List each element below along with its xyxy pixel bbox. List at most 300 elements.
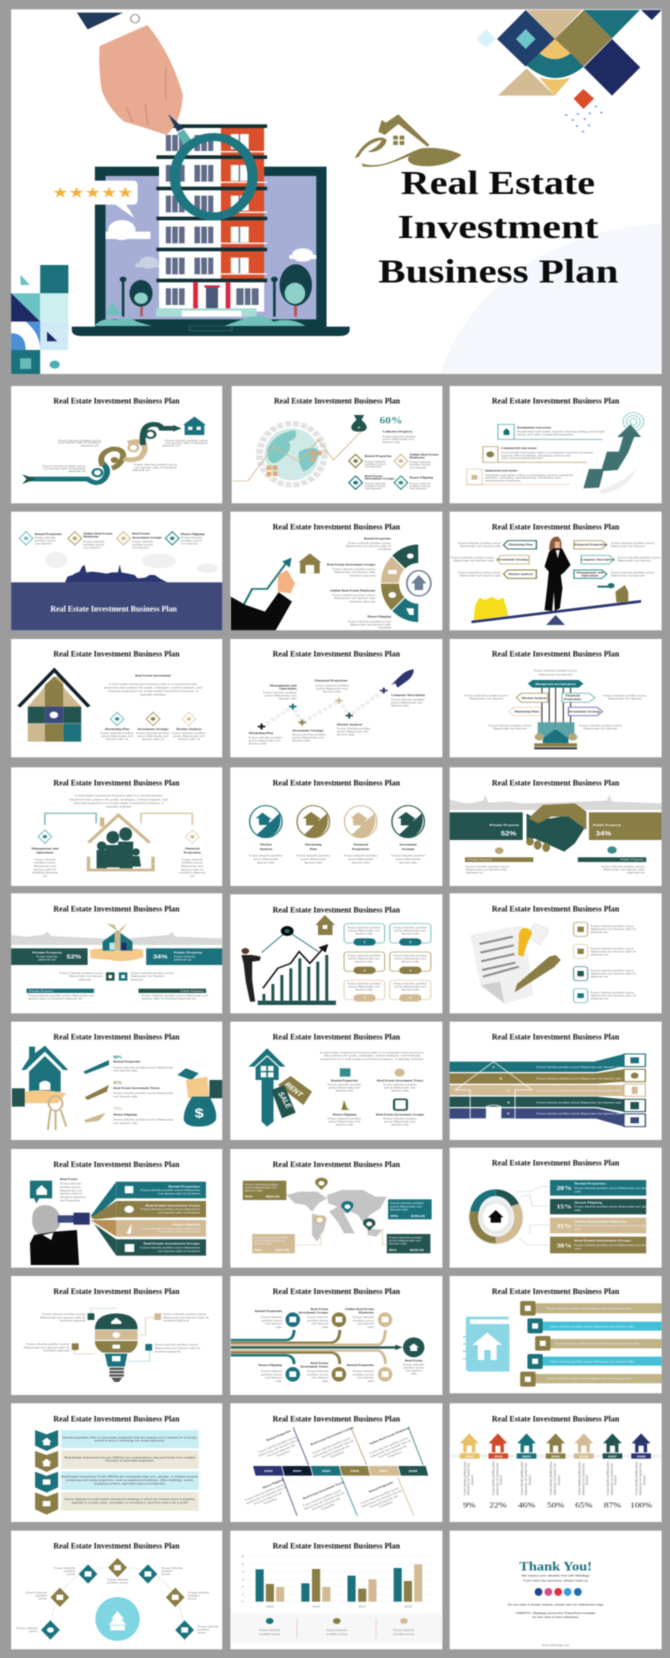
panel: family house: Maecenas non — [181, 864, 204, 868]
chart: bars: 0 — [242, 1600, 244, 1604]
panel: light bulb: Fusce lobortis porttitor purus — [42, 1312, 86, 1316]
panel: light bulb: Fusce lobortis porttitor purus — [26, 1342, 70, 1346]
panel: telescope man: House Flipping — [172, 1223, 200, 1226]
panel: growth chart: laoreet odio — [401, 960, 420, 964]
panel: key with tags: A real estate investment business plan is a comprehensive document — [320, 1051, 424, 1054]
panel: four ovals: Plan — [310, 847, 317, 851]
panel: donut — [450, 1148, 662, 1268]
panel: fishbone timeline: Maecenas non laoreet odio Ut — [303, 1491, 345, 1511]
panel: handshake: 52% — [501, 831, 516, 837]
panel: fishbone timeline: tincidunt placerat vel — [253, 1491, 283, 1505]
panel: globe: Fusce lobortis — [409, 460, 431, 464]
panel: fishbone timeline: Fusce lobortis porttitor purus — [244, 1483, 285, 1502]
panel: bar chart: porttitor purus — [259, 1632, 281, 1636]
panel: seven houses: 2024 — [522, 1455, 531, 1458]
panel: puzzle house: document that outlines the goals, strategies, market analysis, and — [104, 686, 203, 690]
panel: family house: porttitor purus — [34, 861, 56, 865]
panel: fishbone timeline: Maecenas non laoreet odio Ut — [245, 1485, 287, 1505]
panel: light bulb: Maecenas non laoreet odio Ut — [163, 1316, 209, 1319]
panel: donut: Online Real Estate Platforms — [574, 1220, 627, 1223]
icon: sale tag: SALE — [276, 1091, 294, 1109]
panel: seven houses: Maecenas non laoreet odio — [495, 1463, 499, 1495]
chart: bars: 6 — [242, 1555, 244, 1559]
panel: rocket timeline: ✚ — [380, 686, 388, 695]
panel: skyline banner: Fusce lobortis — [132, 540, 154, 543]
panel: bar chart: Fusce lobortis — [393, 1628, 415, 1632]
panel: donut: odio — [574, 1190, 581, 1193]
panel: hand and half wheel: tincidunt placerat — [350, 574, 375, 577]
panel: merging lines: Fusce lobortis — [353, 1315, 375, 1319]
panel: donut: 20% — [556, 1186, 572, 1192]
hero panel: cover slide — [11, 9, 662, 374]
panel: seven houses: Fusce lobortis porttitor purus — [606, 1461, 610, 1495]
panel: hand and half wheel: Maecenas non laoreet odio Ut — [346, 544, 391, 548]
panel: key with tags: Fusce lobortis porttitor — [383, 1117, 417, 1121]
panel: thank you: Do you have a design request, please visit our slideshows page — [508, 1603, 604, 1606]
panel: puzzle house: financial projections for a real estate investment business. It — [108, 689, 198, 693]
panel: merging lines: Real Estate Investment Business Plan — [273, 1287, 401, 1297]
panel: telescope man: Fusce lobortis — [60, 1182, 82, 1186]
panel: world map — [230, 1149, 442, 1268]
trees and lamps — [94, 264, 312, 326]
panel: notebook bars: Fusce lobortis porttitor purus Maecenas non laoreet odio — [547, 1307, 632, 1310]
panel: building tree: Real Estate Investment Business Plan — [492, 650, 620, 659]
panel: family house: vel — [43, 874, 47, 878]
panel: hands with keys and money: non laoreet odio — [113, 1069, 138, 1073]
panel: rocket timeline: purus Maecenas non — [316, 687, 348, 691]
panel: telescope man: non laoreet odio Ut tincidunt — [158, 1249, 200, 1253]
panel: businesswoman on seesaw: Marketing Plan — [508, 543, 533, 547]
panel: telescope man: Rental Properties — [168, 1185, 200, 1189]
panel: thank you: CREDITS: SlideEgg owned this PowerPoint template — [516, 1611, 596, 1615]
panel: seven houses: 100% — [630, 1501, 652, 1509]
panel: telescope man: Fusce lobortis porttitor purus Maecenas — [140, 1227, 201, 1230]
panel: growth chart: 6 — [409, 996, 411, 1000]
panel: businesswoman on seesaw: Investment Strategy — [497, 558, 529, 561]
panel: donut: 35% — [556, 1224, 572, 1230]
panel: businesswoman on seesaw: Maecenas non laoreet — [611, 574, 645, 577]
panel: rocket timeline — [230, 639, 442, 757]
panel: rocket timeline: Operations — [279, 687, 297, 690]
panel: merging lines: Real Estate — [311, 1307, 329, 1311]
panel: family house — [11, 767, 222, 886]
panel: gift house: 52% — [67, 954, 81, 960]
panel: globe — [232, 386, 442, 503]
icon: rocket — [391, 669, 414, 688]
panel: merging lines: Fusce lobortis — [307, 1369, 329, 1373]
panel: stairs arrow: family and other residential properties — [517, 433, 574, 437]
panel: telescope man: non laoreet odio Ut tincidunt — [158, 1230, 200, 1234]
panel: light bulb: Maecenas non laoreet odio Ut — [155, 1346, 200, 1350]
panel: key with tags: House Flipping — [333, 1113, 357, 1117]
panel: world map: $374,00 — [275, 1248, 289, 1252]
panel: skyline banner: non laoreet — [83, 546, 101, 549]
panel: skyline banner: non laoreet — [35, 542, 52, 546]
panel: fishbone timeline: tincidunt placerat vel — [378, 1444, 408, 1459]
icon: money bag in hand — [177, 1068, 222, 1127]
panel: fishbone timeline: Phasellus — [387, 1450, 403, 1459]
panel: building tree: Maecenas non laoreet — [493, 727, 527, 731]
icon: house and leaf logo — [355, 114, 462, 167]
panel: gift house: Public Property — [180, 989, 204, 993]
panel: growth chart: laoreet odio — [355, 988, 373, 992]
panel: bar chart: porttitor purus — [393, 1632, 415, 1636]
panel: gift house: placerat — [79, 978, 91, 981]
panel: world map: purus Maecenas non — [389, 1239, 421, 1243]
panel: world map: 80% — [389, 1248, 397, 1252]
panel: contract key and pen: Maecenas non laoreet odio Ut — [591, 927, 636, 931]
panel: rocket timeline: Marketing Plan — [249, 731, 273, 735]
panel: thank you — [450, 1531, 662, 1649]
panel: gift house: Fusce lobortis porttitor purus — [131, 971, 174, 975]
panel: contract key and pen: Fusce lobortis porttitor purus — [591, 924, 634, 928]
icon: puzzle house — [19, 670, 89, 742]
panel: building tree: Management and Operations — [535, 682, 576, 686]
panel: puzzle house: Fusce lobortis porttitor — [172, 731, 206, 735]
panel: telescope man: Real Estate Investment Trusts — [145, 1204, 200, 1207]
panel: seven houses: 2027 — [608, 1455, 617, 1458]
panel: thank you: We respect your valuable time with SlideEgg! — [522, 1574, 590, 1578]
panel: rocket timeline: Financial Projections — [315, 679, 348, 683]
panel: globe: Investment Groups — [365, 477, 395, 481]
panel: four ovals: Projections — [352, 847, 370, 851]
panel: building tree: Fusce lobortis porttitor purus — [488, 724, 532, 728]
panel: winding arrow: Fusce lobortis porttitor purus — [134, 463, 178, 467]
panel: hands with keys and money — [11, 1022, 222, 1140]
panel: family house: vel — [190, 874, 195, 878]
panel: businesswoman on seesaw: Maecenas non laoreet odio — [453, 559, 494, 563]
panel: family house: financial projections for a real estate investment business. It — [74, 801, 164, 805]
chart: bars: 1 — [242, 1593, 244, 1596]
panel: fishbone timeline: 2026 — [350, 1469, 359, 1473]
panel: growth chart: purus Maecenas non — [394, 929, 427, 932]
panel: fishbone timeline: Maecenas non laoreet odio Ut — [312, 1439, 355, 1458]
panel: globe: Fusce lobortis — [409, 482, 431, 485]
panel: family house: Management and — [31, 847, 59, 850]
panel: diamond arc — [11, 1531, 222, 1649]
panel: telescope man: Fusce lobortis porttitor purus Maecenas — [140, 1207, 201, 1211]
panel: four ovals: purus Maecenas — [301, 857, 326, 861]
panel: telescope man: non laoreet odio Ut tincidunt — [158, 1211, 200, 1214]
panel: diamond arc: Fusce lobortis — [54, 1566, 76, 1570]
panel: diamond arc: purus — [67, 1572, 76, 1576]
panel: merging lines: non laoreet — [405, 1369, 422, 1373]
panel: businesswoman on seesaw — [450, 512, 662, 630]
panel: skyline banner: Real Estate Investment Business Plan — [50, 605, 177, 614]
panel: chevrons and definitions: shopping centers, and other types of properties. — [94, 1482, 166, 1486]
icon: tree house — [109, 1611, 127, 1630]
panel: businesswoman on seesaw: Maecenas non laoreet odio — [460, 574, 501, 577]
panel: skyline banner: Platforms — [83, 535, 99, 538]
panel: key with tags: Real Estate Investment Groups — [376, 1113, 425, 1117]
rating bubble — [50, 181, 138, 218]
panel: seven houses — [450, 1403, 662, 1522]
panel: fishbone timeline: 2020 — [264, 1469, 273, 1473]
panel: businesswoman on seesaw: Operations — [581, 574, 599, 578]
panel: donut: Fusce lobortis porttitor purus Maecenas non laoreet — [574, 1243, 652, 1247]
panel: winding arrow: non laoreet odio Ut tincidunt — [43, 467, 85, 470]
panel: fishbone timeline: Fusce lobortis porttitor purus — [369, 1436, 409, 1455]
panel: four ovals: laoreet odio — [257, 861, 275, 864]
chart: bars: 2015 — [266, 1605, 274, 1608]
panel: telescope man: Real Estate Investment Groups — [143, 1242, 200, 1246]
panel: key with tags: Rental Properties — [331, 1079, 359, 1082]
panel: key with tags: that outlines the goals, strategies, market analysis, and financial — [324, 1054, 420, 1058]
icon: key and house — [598, 583, 628, 602]
panel: merging lines: Fusce lobortis — [261, 1369, 283, 1373]
icon: house — [315, 915, 335, 935]
icon: speech box — [30, 1181, 52, 1203]
mosaic bottom left — [11, 265, 68, 374]
panel: diamond arc: porttitor — [162, 1569, 173, 1573]
panel: key with tags: purus Maecenas non — [384, 1120, 416, 1124]
panel: four ovals: Financial — [353, 843, 368, 847]
panel: hand and half wheel: tincidunt — [378, 547, 391, 551]
panel: fishbone timeline: tincidunt placerat vel — [321, 1444, 350, 1459]
panel: world map: $634,00 — [266, 1195, 280, 1199]
panel: chevrons and definitions: House flipping is a real estate investment strategy in which an investor buys a property, — [65, 1497, 196, 1501]
panel: globe: Collective Property — [383, 430, 413, 434]
panel: gift house: Real Estate Investment Business Plan — [53, 904, 180, 914]
panel: fishbone timeline: Fusce lobortis porttitor purus — [311, 1436, 352, 1455]
panel: diamond arc: porttitor purus — [107, 1581, 129, 1584]
panel: fishbone timeline: tincidunt placerat vel — [266, 1443, 296, 1458]
panel: skyline banner: Rental Properties — [35, 532, 63, 536]
panel: hand and half wheel: Online Real Estate Platforms — [330, 589, 376, 593]
panel: diamond arc: purus — [29, 1629, 38, 1633]
panel stack: ribbons — [91, 1182, 206, 1256]
panel: key with tags: laoreet odio — [391, 1123, 409, 1126]
panel: chevrons and definitions: Rental properties refer to real estate properties that are leased out to tenants for a certain — [63, 1436, 197, 1439]
panel: seven houses: Fusce lobortis porttitor purus — [634, 1461, 639, 1495]
panel: building tree: Market Analysis — [522, 696, 548, 700]
icon: house — [183, 417, 206, 435]
panel: winding arrow: placerat vel — [68, 469, 86, 473]
panel: rocket timeline: Management and — [270, 684, 297, 687]
panel: donut: 15% — [556, 1204, 572, 1210]
panel: stairs arrow: Commercial real estate refers to properties used for business — [501, 451, 593, 455]
panel: donut: House Flipping — [574, 1201, 602, 1204]
panel: seven houses: 2025 — [551, 1455, 560, 1458]
panel: businesswoman on seesaw: Management and — [576, 571, 604, 575]
panel: family house: A real estate investment business plan is a comprehensive — [75, 794, 163, 798]
panel: rocket timeline: Fusce lobortis porttitor — [249, 736, 282, 739]
panel: hand and half wheel: tincidunt — [378, 626, 391, 629]
panel: diamond arc: Fusce lobortis — [188, 1591, 210, 1594]
icon: money bag — [351, 415, 367, 432]
panel: world map: Fusce lobortis porttitor — [390, 1201, 424, 1205]
panel: globe: porttitor purus — [409, 463, 431, 467]
icon: family under roof — [88, 815, 153, 870]
panel: hands with keys and money: Real Estate Investment Business Plan — [53, 1033, 180, 1042]
panel: gift house: placerat vel — [174, 958, 192, 962]
map — [286, 1190, 387, 1242]
panel: world map: 65% — [245, 1195, 253, 1199]
panel: puzzle house: laoreet odio Ut — [178, 737, 200, 741]
panel: globe: laoreet odio — [383, 440, 401, 444]
panel: globe: Fusce lobortis porttitor — [383, 435, 416, 438]
panel: notebook bars: Fusce lobortis porttitor purus Maecenas non laoreet odio — [549, 1360, 635, 1363]
figure: woman — [545, 537, 571, 611]
icon: rent tag — [278, 1076, 312, 1105]
panel: seven houses: Maecenas non laoreet odio — [553, 1463, 557, 1495]
panel: businesswoman on seesaw: Fusce lobortis porttitor purus — [458, 541, 501, 545]
panel: growth chart: Fusce lobortis porttitor — [347, 982, 381, 986]
panel: gift house: Fusce lobortis porttitor purus — [60, 971, 103, 975]
panel: diamond arc: porttitor — [188, 1594, 200, 1597]
panel: hand and half wheel: Maecenas non laoreet odio — [334, 570, 376, 574]
panel: notebook bars: Real Estate Investment Business Plan — [492, 1287, 620, 1297]
panel: diamond arc: Fusce lobortis — [197, 1625, 219, 1628]
panel: house ribbons: Fusce lobortis porttitor purus Maecenas non laoreet odio — [536, 1101, 622, 1104]
panel: rocket timeline: ✚ — [288, 702, 297, 711]
panel: businesswoman on seesaw: Market analysis — [508, 572, 534, 576]
panel: donut: Real Estate Investment Groups — [574, 1239, 631, 1242]
panel: globe: Real Estate — [365, 474, 383, 478]
panel: handshake: placerat vel — [466, 871, 484, 875]
panel: world map: Fusce lobortis porttitor — [389, 1236, 423, 1240]
panel: fishbone timeline — [230, 1403, 442, 1522]
hand — [77, 13, 183, 135]
panel: contract key and pen: Real Estate Investment Business Plan — [492, 904, 620, 914]
title: Real Estate — [401, 165, 595, 202]
panel: fishbone timeline: Fusce lobortis porttitor purus — [360, 1486, 400, 1505]
panel: family house: Fusce lobortis — [182, 858, 203, 861]
panel: four ovals: laoreet odio — [352, 861, 370, 864]
panel: handshake: Private Property — [490, 823, 519, 827]
panel: winding arrow: Fusce lobortis porttitor purus — [43, 464, 86, 468]
magnifier — [168, 114, 253, 216]
panel: building tree: Maecenas non laoreet — [608, 697, 642, 700]
panel: gift house: Private Property — [32, 951, 62, 955]
panel: notebook bars: Fusce lobortis porttitor purus Maecenas non laoreet odio — [555, 1342, 640, 1346]
panel: contract key and pen: Maecenas non laoreet odio Ut — [591, 994, 636, 998]
geometric corner top right — [477, 10, 662, 133]
panel: light bulb: tincidunt placerat — [44, 1349, 69, 1353]
panel: globe: Platforms — [409, 456, 426, 459]
panel: contract key and pen: placerat vel — [591, 930, 608, 934]
panel: rocket timeline: laoreet odio — [249, 742, 267, 745]
panel: globe: Rental Properties — [365, 454, 393, 458]
panel: gift house: 34% — [153, 954, 168, 960]
panel: contract key and pen: placerat vel — [591, 953, 608, 956]
panel: winding arrow: placerat vel — [132, 468, 150, 472]
panel: donut: odio — [574, 1247, 581, 1250]
panel: merging lines: Rental Properties — [347, 1363, 375, 1367]
panel: handshake — [450, 767, 662, 886]
panel: family house: Projections — [184, 851, 202, 854]
rows 4 to 6 — [11, 767, 662, 1140]
panel: fishbone timeline: Fusce lobortis porttitor purus — [302, 1488, 342, 1507]
panel: stairs arrow: Commercial real estate — [501, 446, 537, 450]
panel: merging lines: non laoreet — [311, 1322, 328, 1326]
panel: notebook bars: Fusce lobortis porttitor purus Maecenas non laoreet odio — [549, 1325, 635, 1328]
panel: rocket timeline: ✚ — [257, 723, 266, 731]
panel: businesswoman on seesaw: Financial Projections — [574, 543, 608, 547]
panel: gift house: Fusce lobortis — [174, 955, 196, 958]
panel: world map: purus Maecenas non — [245, 1186, 277, 1189]
panel: skyline banner: porttitor purus — [181, 539, 202, 543]
panel: growth chart: 5 — [364, 996, 366, 1000]
panel: growth chart: 2 — [409, 940, 411, 944]
panel: house ribbons: A — [492, 1065, 496, 1069]
panel: growth chart: Fusce lobortis porttitor — [393, 926, 427, 929]
panel: seven houses: Maecenas non laoreet odio — [466, 1463, 471, 1495]
panel: building tree: Fusce lobortis porttitor purus — [465, 694, 508, 697]
stat 60%: 60% — [380, 416, 403, 426]
panel: hand and half wheel: Maecenas non laoreet odio — [350, 623, 391, 626]
figure: man with telescope — [30, 1205, 90, 1265]
panel: stairs arrow: Residential real estate includes housing listings and single — [517, 430, 605, 434]
panel: handshake: Fusce lobortis porttitor purus — [466, 865, 509, 869]
panel: gift house: Fusce lobortis porttitor purus Maecenas non — [28, 994, 95, 998]
panel: merging lines: non laoreet — [357, 1376, 374, 1380]
panel: skyline banner: Fusce lobortis — [83, 540, 105, 543]
panel: globe: purus Maecenas non — [383, 437, 415, 441]
panel: growth chart: purus Maecenas non — [394, 957, 427, 961]
panel: merging lines: porttitor purus — [261, 1319, 283, 1322]
panel: skyline banner: Fusce lobortis — [35, 536, 56, 540]
panel: rocket timeline: ✚ — [345, 711, 354, 720]
panel: skyline banner: Online Real Estate — [83, 532, 113, 536]
panel: stairs arrow: Residential real estate — [517, 426, 552, 429]
panel: donut: Rental Properties — [574, 1182, 606, 1185]
panel: hands with keys and money: non laoreet odio — [113, 1095, 138, 1098]
panel: merging lines: Platforms — [359, 1311, 375, 1314]
panel: telescope man: Fusce lobortis porttitor purus Maecenas — [140, 1246, 201, 1250]
panel: key with tags: laoreet odio — [391, 1089, 409, 1092]
panel: four ovals: purus Maecenas — [348, 857, 374, 861]
panel: handshake: 34% — [596, 831, 611, 837]
panel: diamond arc: porttitor — [35, 1594, 47, 1597]
panel: merging lines: Real Estate — [311, 1361, 329, 1365]
panel: world map: purus Maecenas non — [390, 1205, 422, 1208]
panel: hand and half wheel: Real Estate Investment Groups — [327, 563, 376, 567]
panel: family house: laoreet odio Ut — [181, 868, 204, 871]
icon: buildings — [534, 722, 577, 749]
panel: house ribbons: E — [507, 1112, 511, 1116]
title — [378, 165, 618, 290]
panel: rocket timeline: purus Maecenas non — [337, 730, 369, 733]
panel: fishbone timeline: 2025 — [322, 1469, 330, 1473]
figure: man pulling rope — [241, 948, 261, 1002]
panel: four ovals: laoreet odio — [304, 861, 322, 864]
panel: light bulb — [11, 1276, 222, 1395]
panel: seven houses: 9% — [463, 1501, 476, 1509]
panel: hands with keys and money: 45% — [113, 1080, 123, 1085]
panel: rocket timeline: laoreet odio — [292, 739, 310, 742]
panel: fishbone timeline: House Flipping — [262, 1478, 285, 1489]
panel: hands with keys and money: Fusce lobortis porttitor purus Maecenas — [113, 1091, 173, 1095]
rows 7 and 8 — [11, 1148, 662, 1395]
chart: bars: 2018 — [404, 1605, 412, 1608]
panel: building tree — [450, 639, 662, 757]
panel: hand and half wheel: Maecenas non laoreet odio — [334, 596, 376, 600]
panel: seven houses: 2026 — [580, 1455, 588, 1458]
panel: globe: Online Real Estate — [409, 453, 439, 457]
panel: world map: $459,00 — [411, 1214, 425, 1218]
panel: merging lines: porttitor purus — [353, 1319, 374, 1322]
panel: skyline banner: non laoreet — [132, 546, 149, 549]
panel: key with tags: Real Estate Investment Trusts — [377, 1079, 424, 1082]
panel: house ribbons: B — [500, 1077, 503, 1081]
panel: winding arrow: Fusce lobortis porttitor purus — [58, 439, 102, 442]
panel: winding arrow: Real Estate Investment Business Plan — [53, 397, 180, 406]
panel: fishbone timeline: Phasellus — [263, 1497, 278, 1505]
panel: key with tags: Fusce lobortis porttitor — [328, 1083, 361, 1086]
panel: gift house: Maecenas non laoreet — [131, 974, 165, 978]
panel: handshake: Maecenas non laoreet odio — [604, 868, 645, 872]
